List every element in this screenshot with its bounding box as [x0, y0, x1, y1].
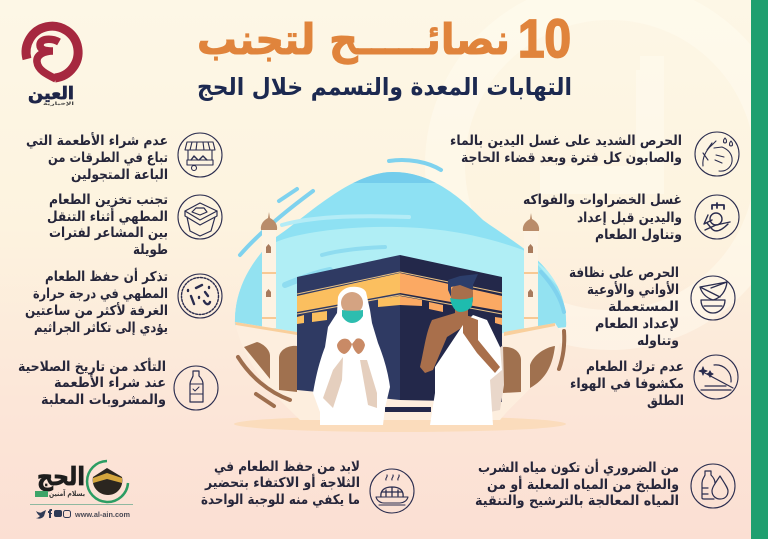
decorative swooshes: [240, 160, 564, 312]
tip text: [475, 459, 679, 509]
brown curved strokes: [238, 331, 564, 406]
tip text: وتناوله: [637, 333, 679, 349]
tip text: والصابون كل فترة وبعد قضاء الحاجة: [461, 150, 682, 166]
tip text: غسل الخضراوات والفواكه: [523, 192, 682, 208]
tip text: يؤدي إلى تكاثر الجراثيم: [34, 320, 168, 336]
tip: storing cooked food: [47, 192, 222, 258]
logo: Al-Ain: الإخبارية: [43, 102, 75, 107]
tip text: المستعملة: [608, 299, 679, 315]
tip: keep food covered: [570, 355, 738, 409]
icon: bottle and drop: [691, 464, 735, 508]
watermark ring: [445, 0, 768, 330]
title: نصائـــــح لتجنب: [197, 15, 510, 65]
tip text: مكشوفا في الهواء: [570, 376, 684, 392]
tip: wash vegetables: [523, 192, 739, 243]
subtitle: التهابات المعدة والتسمم خلال الحج: [197, 73, 572, 101]
tip text: [570, 359, 684, 409]
tip text: المطهي في درجة حرارة: [33, 286, 168, 302]
logo: Al-Ain: العين: [28, 84, 74, 104]
Hajj campaign logo: الحج: [37, 462, 85, 492]
tip: street food: [26, 132, 222, 183]
tip text: الأواني والأوعية: [587, 281, 679, 298]
tip text: الغرفة لأكثر من ساعتين: [25, 302, 168, 319]
tip: refrigerate food: [201, 459, 414, 513]
Hajj campaign logo: www.al-ain.com: [74, 510, 130, 519]
tip text: عدم ترك الطعام: [586, 359, 684, 375]
pilgrim man: [420, 274, 504, 425]
tip text: [18, 358, 166, 408]
tip text: [569, 265, 679, 349]
tip: bacteria at room temperature: [25, 268, 222, 336]
tip text: [523, 192, 682, 243]
tip text: تباع في الطرقات من: [48, 150, 168, 166]
tip text: واليدين قبل إعداد: [577, 210, 682, 226]
icon: bottle label: [174, 366, 218, 410]
tip text: من الضروري أن تكون مياه الشرب: [478, 459, 679, 476]
icon: washing hands: [695, 132, 739, 176]
tip text: ما يكفي منه للوجبة الواحدة: [201, 492, 360, 508]
icon: food cart: [178, 133, 222, 177]
Kaaba: [297, 255, 502, 412]
Hajj campaign logo: بسلام آمنين: [49, 489, 85, 498]
tip text: الطلق: [647, 393, 684, 409]
icon: uncovered plate: [694, 355, 738, 399]
tip text: والطبخ من المياه المعلبة أو من: [487, 476, 679, 493]
tip text: [201, 459, 360, 508]
right minaret: [523, 213, 539, 328]
tip text: عدم شراء الأطعمة التي: [26, 132, 168, 149]
icon: food container: [178, 195, 222, 239]
arches: [244, 342, 555, 393]
tip text: المطهي أثناء التنقل: [47, 208, 168, 225]
title: 10: [518, 9, 571, 69]
tip text: الحرص على نظافة: [569, 265, 679, 281]
icon: stacked bowls: [691, 276, 735, 320]
tip text: التأكد من تاريخ الصلاحية: [18, 358, 166, 375]
icon: steaming meal: [370, 469, 414, 513]
tip text: [47, 192, 168, 258]
tip text: المياه المعالجة بالترشيح والتنقية: [475, 493, 679, 509]
tip text: طويلة: [133, 242, 168, 258]
tip text: والمشروبات المعلبة: [41, 392, 166, 408]
central illustration: Kaaba and pilgrims: [230, 160, 570, 432]
tip text: تذكر أن حفظ الطعام: [45, 268, 168, 285]
left minaret: [261, 212, 277, 328]
tip: check expiry date: [18, 358, 218, 410]
icon: Kaaba emblem: [87, 461, 128, 502]
green side bar: [751, 0, 768, 539]
tip text: [450, 133, 682, 166]
sky dome: [234, 172, 566, 334]
icon: tap over vegetables: [695, 195, 739, 239]
tip text: الحرص الشديد على غسل اليدين بالماء: [450, 133, 682, 149]
tip text: لإعداد الطعام: [595, 316, 679, 332]
ground shadow: [234, 416, 566, 432]
tip text: [26, 132, 168, 183]
Hajj campaign logo: [30, 461, 133, 519]
icon: bacteria dish: [178, 274, 222, 318]
social icons: [36, 509, 70, 519]
tip text: الثلاجة أو الاكتفاء بتحضير: [204, 474, 360, 491]
tip text: لابد من حفظ الطعام في: [214, 459, 360, 475]
tip: wash hands: [450, 132, 739, 176]
courtyard floor: [235, 322, 562, 420]
tip text: [25, 268, 168, 336]
tip text: عند شراء الأطعمة: [54, 374, 166, 391]
tip text: الباعة المتجولين: [71, 167, 168, 183]
tip: clean dishes: [569, 265, 735, 349]
tip: safe water: [475, 459, 735, 509]
tip text: تجنب تخزين الطعام: [49, 192, 168, 208]
logo: Al-Ain: [26, 26, 78, 107]
pilgrim woman: [313, 287, 390, 425]
tip text: وتناول الطعام: [595, 227, 682, 243]
tip text: بين المشاعر لفترات: [49, 225, 168, 241]
